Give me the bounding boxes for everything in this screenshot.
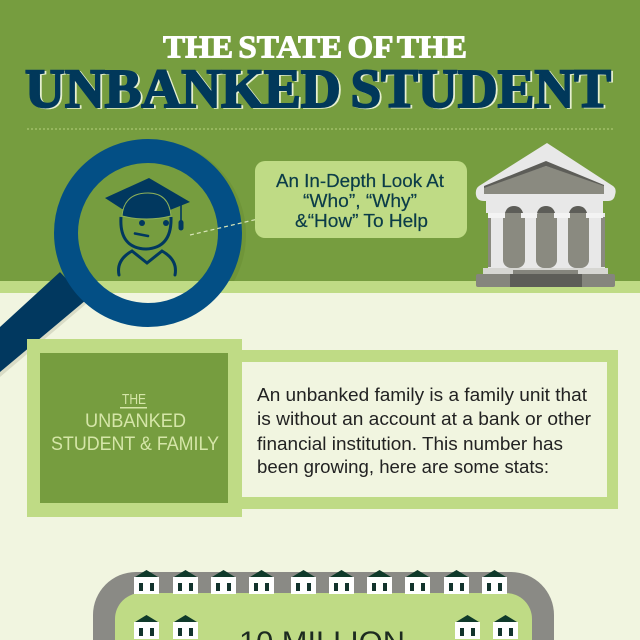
magnifying glass	[0, 140, 258, 377]
definition text: An unbanked family is a family unit that	[257, 384, 587, 405]
panel: section heading: UNBANKED	[85, 410, 186, 432]
header band	[0, 0, 640, 281]
title: unbanked student: UNBANKED STUDENT	[25, 58, 611, 119]
definition text: financial institution. This number has	[257, 433, 563, 454]
callout: An In-Depth Look At	[276, 170, 444, 191]
panel: section heading: STUDENT & FAMILY	[51, 433, 219, 455]
definition text: been growing, here are some stats:	[257, 456, 549, 477]
panel: section heading: THE	[122, 392, 146, 408]
second row of houses	[134, 615, 518, 639]
callout: &“How” To Help	[295, 210, 428, 231]
panel: road of houses	[93, 570, 554, 640]
callout	[255, 161, 467, 238]
top row of houses	[134, 570, 507, 594]
title: unbanked student: UNBANKED STUDENT	[27, 59, 613, 120]
face	[121, 217, 171, 249]
columns and niches	[488, 213, 605, 269]
definition text: is without an account at a bank or other	[257, 408, 591, 429]
shoulders	[119, 251, 175, 275]
definition text	[257, 384, 591, 477]
callout: “Who”, “Why”	[303, 190, 417, 211]
cap	[105, 178, 190, 210]
panel: section heading	[27, 339, 242, 517]
student icon	[105, 178, 190, 275]
icon: bank building	[476, 143, 616, 287]
panel: definition box	[240, 350, 618, 509]
lens ring	[66, 151, 230, 315]
title: the state of the: THE STATE OF THE	[163, 28, 467, 64]
handle	[0, 272, 86, 377]
